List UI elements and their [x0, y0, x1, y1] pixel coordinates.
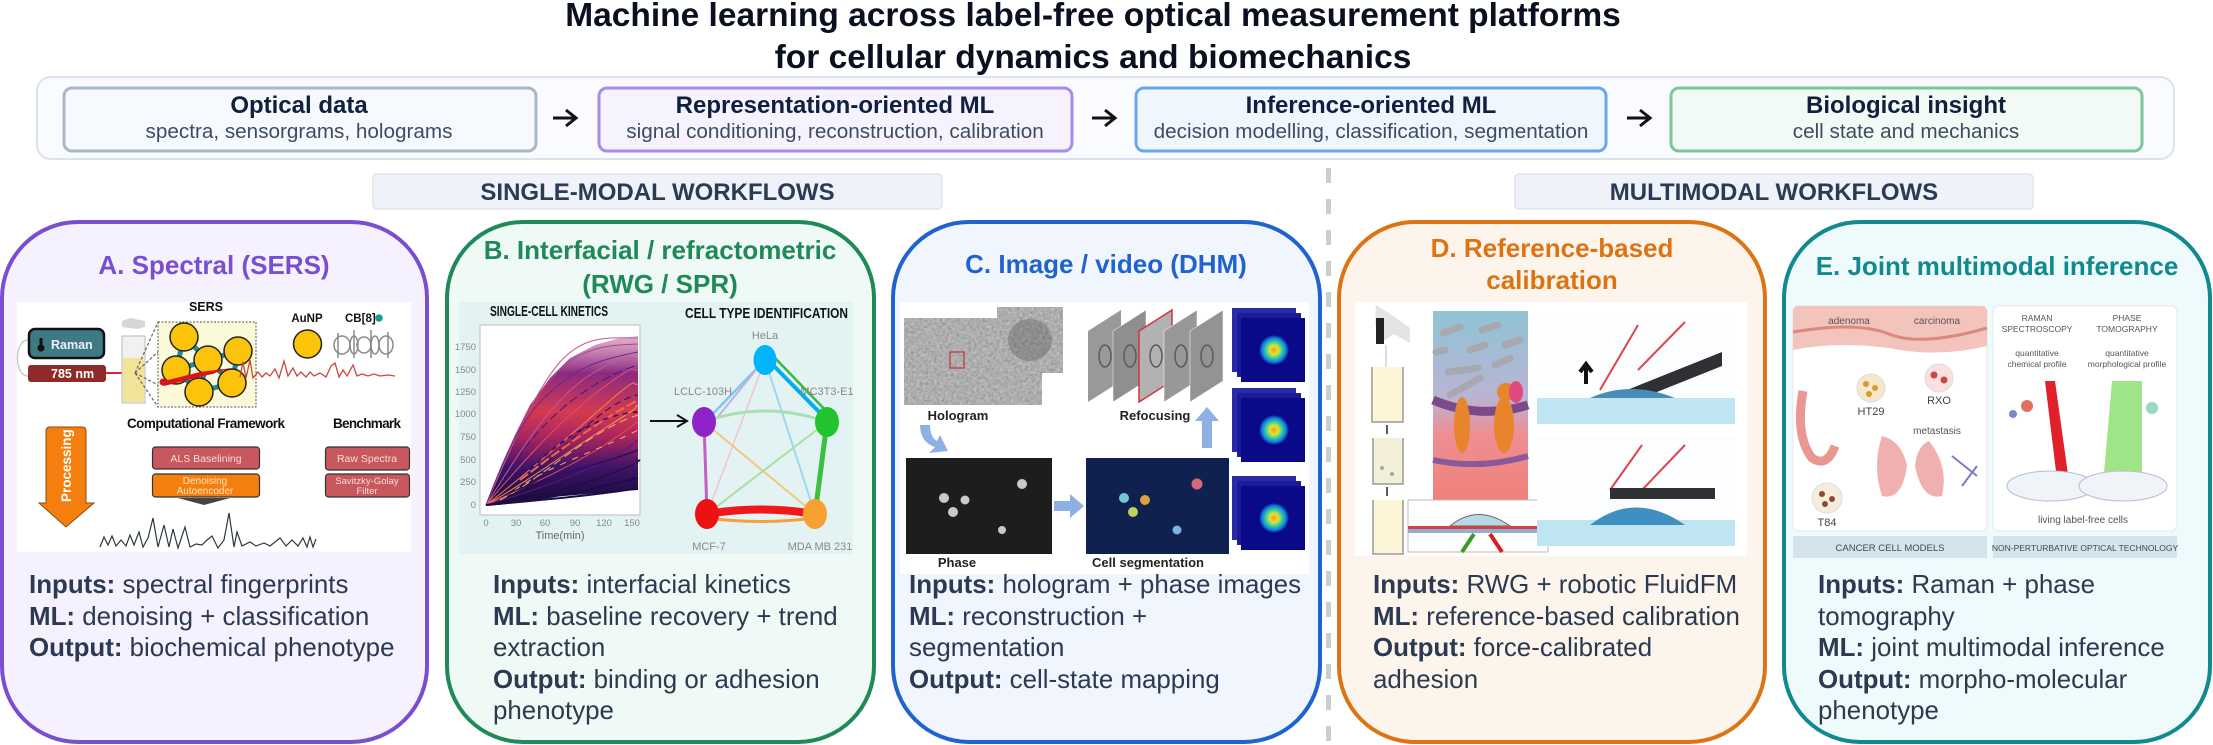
panel E heading: E. Joint multimodal inference	[1816, 251, 2178, 281]
optical technology chip: NON-PERTURBATIVE OPTICAL TECHNOLOGY	[1992, 543, 2178, 553]
kinetics chart: 1000	[455, 409, 476, 420]
Savitzky-Golay filter box	[326, 474, 410, 497]
hologram image: Hologram	[928, 408, 988, 423]
optical technology panel: living label-free cells	[2038, 515, 2128, 526]
optical technology panel: RAMAN	[2022, 313, 2052, 323]
pipeline step: representation-oriented ML: signal conditioning, reconstruction, calibration	[626, 120, 1044, 143]
ALS baselining box	[152, 447, 260, 469]
Savitzky-Golay filter box: Savitzky-Golay	[335, 476, 399, 487]
pipeline bar	[37, 77, 2174, 159]
panel E text: phenotype	[1818, 697, 1939, 725]
cancer cell models panel: RXO	[1927, 395, 1951, 407]
cell segmentation image	[1086, 458, 1229, 570]
pipeline step: biological insight: Biological insight	[1806, 92, 2006, 119]
cell type identification network: MDA MB 231	[788, 541, 852, 553]
optical technology panel: morphological profile	[2088, 359, 2166, 369]
optical technology panel: TOMOGRAPHY	[2096, 324, 2158, 334]
panel D text: Inputs: RWG + robotic FluidFM	[1373, 571, 1737, 599]
processing arrow	[39, 427, 94, 527]
section heading: single-modal workflows	[373, 174, 942, 209]
kinetics chart: 750	[460, 432, 476, 443]
panel E text: ML: joint multimodal inference	[1818, 634, 2165, 662]
kinetics chart: 120	[596, 518, 612, 529]
SERS label: SERS	[189, 300, 223, 314]
arrow	[553, 110, 576, 126]
785 nm laser: 785 nm	[51, 367, 94, 381]
panel C text: Output: cell-state mapping	[909, 666, 1220, 694]
panel A text	[29, 571, 394, 662]
panel A text: ML: denoising + classification	[29, 603, 369, 631]
pipeline step: optical data: spectra, sensorgrams, holograms	[146, 120, 452, 143]
upper force spectroscopy panel	[1537, 314, 1735, 424]
red SERS spectrum	[240, 360, 395, 378]
CB[8] legend	[334, 313, 393, 358]
denoised spectrum	[100, 513, 316, 548]
kinetics chart: 1250	[455, 387, 476, 398]
cancer cell models panel: metastasis	[1913, 426, 1961, 437]
cancer cell models chip	[1793, 536, 1987, 558]
section heading: single-modal workflows: SINGLE-MODAL WORKFLOWS	[480, 179, 835, 206]
panel C text: segmentation	[909, 634, 1064, 662]
title: for cellular dynamics and biomechanics	[775, 39, 1411, 76]
panel B: interfacial refractometric	[447, 222, 874, 742]
cancer cell models panel	[1793, 306, 1987, 531]
panel B text: ML: baseline recovery + trend	[493, 603, 838, 631]
panel E text	[1818, 571, 2165, 725]
benchmark label: Benchmark	[333, 416, 401, 431]
cell type identification network: MC3T3-E1	[800, 386, 854, 398]
denoising autoencoder box: Denoising	[183, 476, 227, 487]
panel B figure	[455, 302, 854, 554]
cancer cell models panel: carcinoma	[1914, 316, 1960, 327]
panel B heading: (RWG / SPR)	[582, 269, 738, 299]
arrow	[1627, 110, 1650, 126]
denoising autoencoder box: Autoencoder	[177, 486, 234, 497]
pipeline step: biological insight	[1671, 88, 2142, 151]
optical technology panel	[1993, 306, 2177, 531]
panel E text: Output: morpho-molecular	[1818, 666, 2128, 694]
pipeline step: biological insight: cell state and mechanics	[1793, 120, 2019, 143]
panel A: spectral SERS	[2, 222, 427, 742]
optical technology panel: quantitative	[2015, 348, 2059, 358]
panel B heading	[484, 235, 836, 299]
kinetics chart: Time(min)	[535, 530, 585, 542]
cell type identification network: LCLC-103H	[674, 386, 732, 398]
panel D text: ML: reference-based calibration	[1373, 603, 1740, 631]
kinetics chart: 150	[624, 518, 640, 529]
panel E text: Inputs: Raman + phase	[1818, 571, 2095, 599]
optical technology panel: SPECTROSCOPY	[2002, 324, 2073, 334]
Savitzky-Golay filter box: Filter	[356, 486, 378, 497]
panel D: reference-based calibration	[1339, 222, 1765, 742]
computational framework label: Computational Framework	[127, 416, 285, 431]
title	[565, 0, 1621, 76]
panel A text: Output: biochemical phenotype	[29, 634, 394, 662]
cell type identification network	[674, 305, 854, 553]
kinetics chart: 90	[570, 518, 580, 529]
cell type identification network: MCF-7	[692, 541, 726, 553]
kinetics chart: 250	[460, 477, 476, 488]
hologram image	[904, 307, 1063, 423]
optical technology panel: chemical profile	[2007, 359, 2067, 369]
panel C text: ML: reconstruction +	[909, 603, 1147, 631]
phase image	[906, 458, 1052, 570]
kinetics chart	[455, 303, 640, 542]
pipeline step: optical data	[64, 88, 536, 151]
panel C: image video DHM	[893, 222, 1320, 742]
blue arrow hologram to phase	[920, 425, 948, 453]
cancer cell models panel: T84	[1818, 517, 1836, 529]
panel D figure	[1355, 302, 1747, 556]
panel A figure	[17, 300, 411, 552]
refocusing stack	[1088, 310, 1223, 423]
phase image: Phase	[938, 555, 976, 570]
cell membrane illustration	[1433, 311, 1528, 500]
kinetics chart: 1750	[455, 342, 476, 353]
panel B heading: B. Interfacial / refractometric	[484, 235, 836, 265]
pipeline step: optical data: Optical data	[230, 92, 368, 119]
optical technology panel: PHASE	[2113, 313, 2142, 323]
cancer cell models chip: CANCER CELL MODELS	[1836, 543, 1944, 554]
panel D text	[1373, 571, 1740, 694]
panel A text: Inputs: spectral fingerprints	[29, 571, 348, 599]
pipeline step: inference-oriented ML: Inference-oriented ML	[1246, 92, 1496, 119]
arrow to cell type network	[650, 415, 687, 427]
panel D heading: calibration	[1486, 265, 1618, 295]
panel B text	[493, 571, 838, 725]
panel B text: phenotype	[493, 697, 614, 725]
panel A heading: A. Spectral (SERS)	[98, 250, 330, 280]
kinetics chart: 500	[460, 455, 476, 466]
kinetics chart: 1500	[455, 365, 476, 376]
785 nm laser	[28, 365, 135, 382]
cancer cell models panel: HT29	[1858, 406, 1884, 418]
lower force spectroscopy panel	[1537, 436, 1735, 546]
ALS baselining box: ALS Baselining	[170, 453, 242, 465]
kinetics chart: 60	[540, 518, 550, 529]
raw spectra box	[326, 447, 410, 470]
cell segmentation image: Cell segmentation	[1092, 555, 1204, 570]
panel B text: Inputs: interfacial kinetics	[493, 571, 791, 599]
pipeline step: representation-oriented ML	[599, 88, 1072, 151]
kinetics chart: 0	[471, 500, 476, 511]
panel E text: tomography	[1818, 603, 1955, 631]
cell type identification network: HeLa	[752, 330, 779, 342]
Raman instrument: Raman	[51, 338, 93, 352]
raw spectra box: Raw Spectra	[337, 453, 397, 465]
reconstructed phase stacks	[1232, 308, 1305, 550]
AuNP legend: AuNP	[291, 313, 323, 325]
kinetics chart: 30	[511, 518, 521, 529]
pipeline step: representation-oriented ML: Representation-oriented ML	[676, 92, 994, 119]
section heading: multimodal workflows: MULTIMODAL WORKFLOWS	[1610, 179, 1938, 206]
nanoparticle assembly	[158, 322, 256, 407]
pipette and beakers	[1372, 305, 1410, 554]
kinetics chart: 0	[483, 518, 489, 529]
CB[8] legend: CB[8]	[345, 313, 376, 325]
optical technology panel: quantitative	[2105, 348, 2149, 358]
kinetics chart: SINGLE-CELL KINETICS	[490, 303, 608, 320]
processing arrow: Processing	[59, 429, 74, 502]
panel C heading: C. Image / video (DHM)	[965, 249, 1247, 279]
pipeline step: inference-oriented ML	[1136, 88, 1606, 151]
arrow	[1092, 110, 1115, 126]
panel D heading	[1431, 233, 1673, 295]
blue arrow phase to segmentation	[1054, 494, 1084, 518]
blue arrow segmentation to refocusing	[1195, 407, 1219, 448]
panel B text: Output: binding or adhesion	[493, 666, 820, 694]
refocusing stack: Refocusing	[1120, 408, 1190, 423]
panel E figure	[1793, 306, 2178, 558]
optical technology chip	[1992, 536, 2178, 558]
panel C figure	[900, 302, 1309, 574]
cuvette	[122, 318, 158, 407]
panel C text: Inputs: hologram + phase images	[909, 571, 1301, 599]
sensor substrate schematic	[1408, 500, 1548, 552]
panel D heading: D. Reference-based	[1431, 233, 1673, 263]
panel D text: adhesion	[1373, 666, 1478, 694]
cell type identification network: CELL TYPE IDENTIFICATION	[685, 305, 848, 322]
pipeline step: inference-oriented ML: decision modelling, classification, segmentation	[1154, 120, 1588, 143]
panel D text: Output: force-calibrated	[1373, 634, 1652, 662]
panel E: joint multimodal inference	[1784, 222, 2210, 742]
denoising autoencoder box	[152, 474, 260, 505]
panel B text: extraction	[493, 634, 605, 662]
cancer cell models panel: adenoma	[1828, 316, 1870, 327]
AuNP legend	[291, 313, 323, 358]
section heading: multimodal workflows	[1515, 174, 2033, 209]
Raman instrument	[18, 329, 104, 376]
panel C text	[909, 571, 1301, 694]
